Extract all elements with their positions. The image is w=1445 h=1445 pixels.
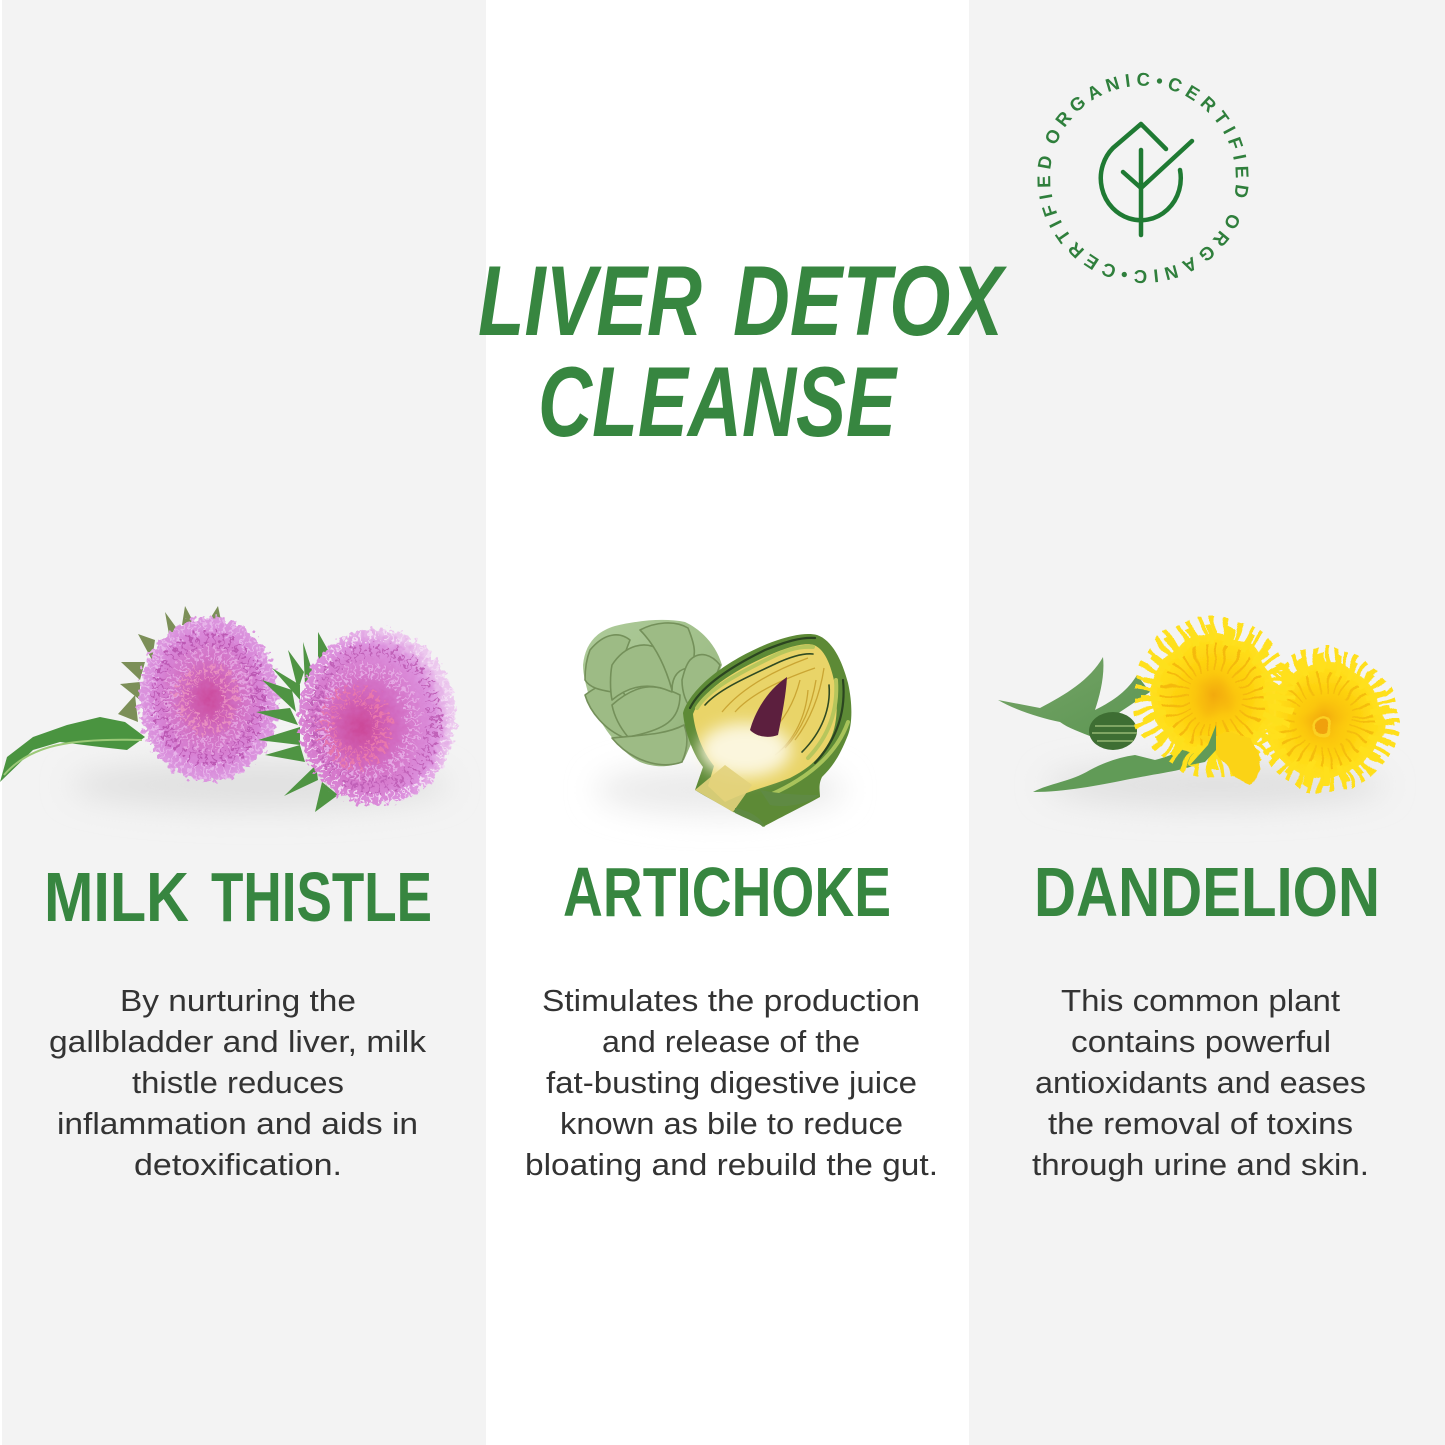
first yellow flower xyxy=(1146,629,1282,782)
petals xyxy=(1146,629,1282,765)
panel: right column background xyxy=(969,0,1445,1445)
flower bud xyxy=(1089,712,1137,750)
description: known as bile to reduce xyxy=(560,1106,903,1141)
second flower head xyxy=(299,629,455,805)
whole artichoke body xyxy=(583,620,722,766)
description xyxy=(1032,983,1369,1182)
description: contains powerful xyxy=(1071,1024,1331,1059)
description: By nurturing the xyxy=(120,983,356,1018)
description: Stimulates the production xyxy=(542,983,920,1018)
panel: artichoke copy xyxy=(525,853,938,1182)
cut half outer leaves xyxy=(683,634,851,827)
heading xyxy=(44,858,432,936)
illustration: dandelion xyxy=(998,629,1387,807)
heading: THISTLE xyxy=(211,858,432,936)
title: DETOX xyxy=(733,245,1007,356)
base stem xyxy=(695,765,752,812)
description: thistle reduces xyxy=(132,1065,344,1100)
bud stripes xyxy=(1092,726,1137,741)
cast shadow xyxy=(1045,763,1385,807)
inner flesh xyxy=(693,644,837,802)
description: antioxidants and eases xyxy=(1035,1065,1366,1100)
flower center xyxy=(1317,720,1333,736)
title: CLEANSE xyxy=(538,346,898,457)
upper leaf xyxy=(998,657,1150,738)
illustration: milk thistle xyxy=(0,606,455,812)
creamy heart xyxy=(699,723,791,777)
purple choke xyxy=(750,677,787,737)
panel: dandelion copy xyxy=(1032,853,1380,1182)
description: detoxification. xyxy=(134,1147,342,1182)
stem vein xyxy=(4,740,142,775)
flower disc xyxy=(1152,635,1276,759)
description: This common plant xyxy=(1061,983,1340,1018)
description: the removal of toxins xyxy=(1048,1106,1353,1141)
sepals of second flower xyxy=(256,632,338,812)
second yellow flower xyxy=(1263,658,1387,782)
stem leaf xyxy=(0,717,145,782)
description: bloating and rebuild the gut. xyxy=(525,1147,938,1182)
description: gallbladder and liver, milk xyxy=(49,1024,427,1059)
description xyxy=(49,983,427,1182)
illustration: artichoke xyxy=(583,620,851,827)
description: and release of the xyxy=(602,1024,860,1059)
title xyxy=(478,245,1007,457)
panel: center column background xyxy=(486,0,969,1445)
petals xyxy=(1263,658,1387,782)
panel: milk thistle copy xyxy=(44,858,432,1182)
description xyxy=(525,983,938,1182)
title: LIVER xyxy=(478,245,702,356)
yellow fibers xyxy=(722,658,824,755)
heading: MILK xyxy=(44,858,189,936)
badge ring text: ORGANIC•CERTIFIED ORGANIC•CERTIFIED xyxy=(1037,72,1249,284)
heading: DANDELION xyxy=(1034,853,1380,931)
lower leaf xyxy=(1033,725,1216,792)
body base xyxy=(583,620,722,766)
description: fat-busting digestive juice xyxy=(546,1065,917,1100)
cast shadow xyxy=(595,764,845,816)
lower curling leaves xyxy=(735,790,820,827)
description: inflammation and aids in xyxy=(57,1106,418,1141)
leaf rim stripes xyxy=(690,638,848,795)
panel: left column background xyxy=(2,0,486,1445)
leaf and check mark xyxy=(1101,124,1192,235)
overlapping leaf tip xyxy=(1190,725,1216,765)
overlapping scales xyxy=(585,623,720,765)
flower disc xyxy=(1268,663,1382,777)
cast shadow xyxy=(70,761,450,809)
icon: certified organic badge xyxy=(1037,72,1249,284)
first flower head xyxy=(139,617,279,781)
heading: ARTICHOKE xyxy=(563,853,891,931)
sepals of first flower xyxy=(118,606,222,722)
description: through urine and skin. xyxy=(1032,1147,1369,1182)
lower petal tuft xyxy=(1200,735,1260,782)
